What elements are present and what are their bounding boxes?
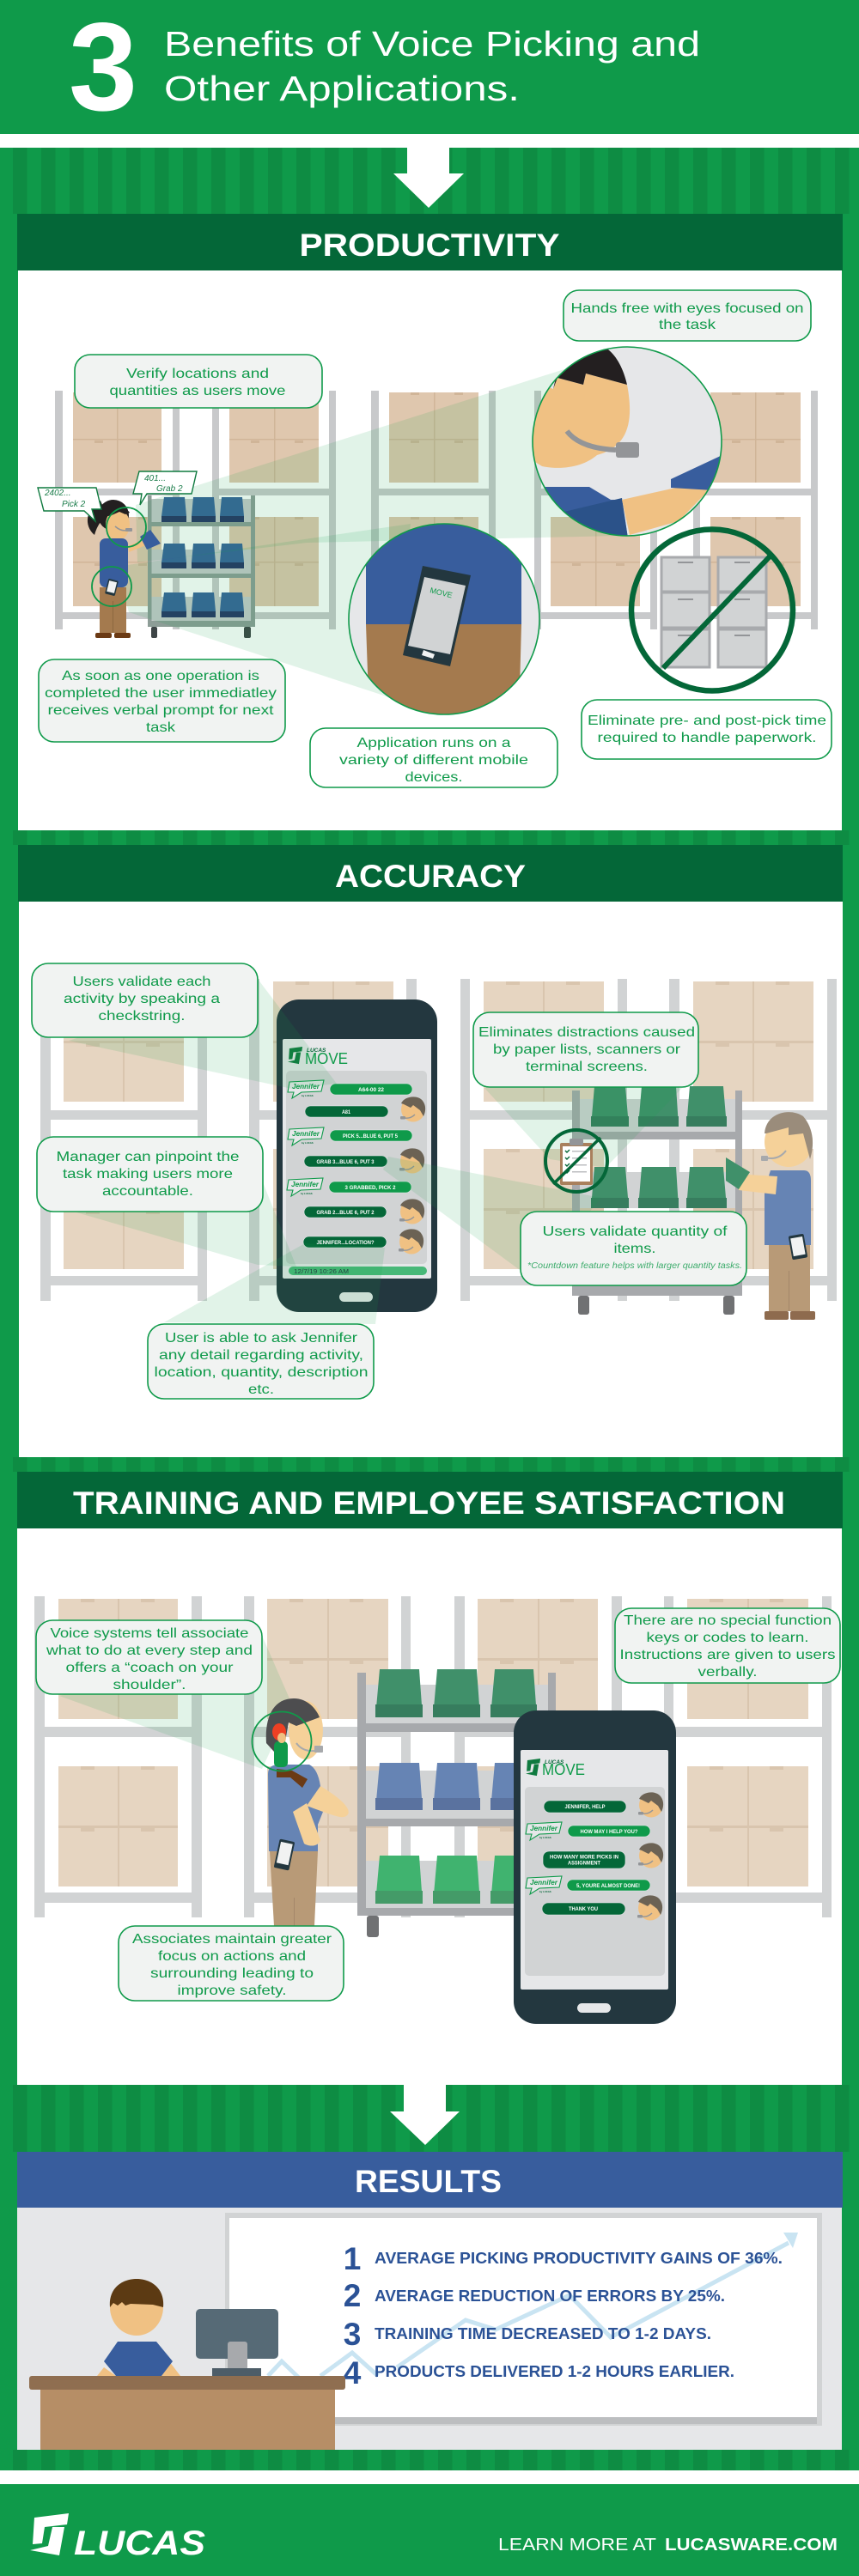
phone app: training conversation (514, 1710, 676, 2024)
panel: accuracy (18, 845, 843, 1457)
person: accuracy worker (726, 1112, 815, 1320)
speech bubble: 401 grab 2: 401... (144, 474, 166, 483)
jennifer message 1 (526, 1822, 562, 1840)
result 4 (344, 2355, 734, 2391)
status bar (289, 1267, 427, 1275)
logo: lucas: LUCAS (74, 2524, 205, 2562)
callout: eliminate paperwork: Eliminate pre- and post-pick time (588, 714, 826, 728)
heading: accuracy: ACCURACY (335, 859, 526, 894)
jennifer message 2 (526, 1876, 562, 1894)
callout: no special keys: Instructions are given to users (620, 1648, 835, 1662)
callout: verbal prompt (39, 659, 285, 742)
heading: training: TRAINING AND EMPLOYEE SATISFACTION (73, 1485, 785, 1521)
worker figure (88, 500, 161, 638)
logo: lucas move: LUCAS (545, 1759, 564, 1765)
pill: how many more picks: HOW MANY MORE PICKS IN (550, 1855, 618, 1860)
heading: productivity: PRODUCTIVITY (299, 228, 560, 263)
pill: thank you (542, 1903, 625, 1915)
cart with green bins (572, 1086, 742, 1315)
pocket phone (105, 579, 119, 596)
result 1: 1 (344, 2241, 361, 2276)
callout: verbal prompt: receives verbal prompt for next (48, 703, 274, 718)
callout: validate quantity: Users validate quantity of (543, 1224, 728, 1239)
icon: user face (399, 1148, 424, 1173)
logo: lucas move (526, 1759, 585, 1778)
callout: users validate: checkstring. (98, 1009, 186, 1024)
icon: user face (399, 1229, 423, 1254)
title text: Benefits of Voice Picking and (164, 24, 700, 64)
callout: associates safety (119, 1926, 344, 2001)
whiteboard (225, 2213, 822, 2426)
icon: user face (638, 1792, 663, 1817)
callout: ask jennifer (148, 1324, 374, 1399)
callout: manager: Manager can pinpoint the (57, 1150, 240, 1164)
pill: A64-00 22 (330, 1084, 412, 1095)
icon: user face (399, 1199, 424, 1224)
result 4: PRODUCTS DELIVERED 1-2 HOURS EARLIER. (375, 2362, 734, 2380)
header band (0, 0, 859, 148)
jennifer message 1 (288, 1080, 324, 1098)
pill: pick 5 (330, 1130, 412, 1141)
learn more link text: LEARN MORE AT (498, 2536, 656, 2555)
callout: ask jennifer: User is able to ask Jennifer (165, 1331, 358, 1346)
headset (115, 526, 129, 531)
callout: mobile devices: devices. (405, 770, 462, 785)
person at desk (97, 2279, 180, 2376)
pill: how many more picks (543, 1851, 625, 1868)
result 2: AVERAGE REDUCTION OF ERRORS BY 25%. (375, 2287, 725, 2305)
computer monitor (196, 2309, 278, 2377)
callout: validate quantity (521, 1212, 746, 1285)
jennifer message 3: Jennifer (291, 1181, 320, 1188)
callout: ask jennifer: etc. (248, 1382, 274, 1397)
callout: users validate (32, 963, 258, 1037)
callout: voice systems (36, 1620, 262, 1694)
icon: user face (638, 1843, 663, 1868)
callout: no special keys: There are no special function (624, 1613, 832, 1628)
heading: results: RESULTS (355, 2164, 502, 2199)
pill: grab 3: GRAB 3...BLUE 6, PUT 3 (316, 1159, 375, 1165)
callout: mobile devices (310, 728, 557, 787)
pill: jennifer help: JENNIFER, HELP (565, 1804, 606, 1810)
pill: A81 (305, 1106, 388, 1117)
panel: training and employee satisfaction (17, 1472, 843, 2085)
callout: associates safety: Associates maintain greater (132, 1932, 332, 1947)
callout: associates safety: focus on actions and (158, 1949, 306, 1964)
light beams (69, 979, 682, 1324)
arrow: header to productivity (393, 148, 464, 208)
callout: voice systems: shoulder”. (113, 1678, 186, 1692)
cart with bins (357, 1669, 556, 1937)
callout: voice systems: what to do at every step and (46, 1643, 253, 1658)
callout: verbal prompt: completed the user immediatley (45, 686, 277, 701)
callout: hands free (564, 290, 811, 341)
coach on shoulder (272, 1723, 308, 1788)
heading: productivity (17, 214, 843, 270)
callout: eliminates distractions: by paper lists, scanners or (493, 1042, 681, 1057)
pill: how may i help you (568, 1826, 650, 1837)
callout: hands free: Hands free with eyes focused on (570, 301, 804, 316)
light beam (59, 1637, 292, 1769)
callout: voice systems: offers a “coach on your (65, 1661, 234, 1675)
pill: A81: A81 (342, 1109, 350, 1115)
jennifer message 3: by LUCAS (301, 1192, 313, 1195)
status bar: 12/7/19 10:26 AM (294, 1267, 349, 1275)
pill: how may i help you: HOW MAY I HELP YOU? (581, 1829, 638, 1835)
cart with blue bins (148, 495, 255, 638)
icon: phone close-up circle (349, 515, 539, 721)
callout: manager: task making users more (63, 1167, 233, 1182)
callout: hands free: the task (659, 318, 716, 332)
icon: user face (400, 1097, 425, 1121)
jennifer message 1: by LUCAS (539, 1836, 551, 1839)
pill: thank you: THANK YOU (569, 1906, 598, 1912)
title text (164, 24, 700, 108)
learn more link text: LUCASWARE.COM (665, 2536, 838, 2555)
callout: users validate: Users validate each (72, 975, 211, 989)
warehouse racks and boxes (40, 979, 837, 1301)
pill: jennifer location (303, 1236, 387, 1248)
footer (0, 2470, 859, 2576)
callout: verbal prompt: task (146, 720, 176, 735)
result 2 (344, 2278, 725, 2313)
pill: 3 grabbed: 3 GRABBED, PICK 2 (345, 1185, 396, 1191)
phone home button (339, 1292, 373, 1302)
jennifer message 1: Jennifer (530, 1825, 558, 1832)
panel: results (17, 2152, 843, 2450)
callout: verify locations (75, 355, 322, 408)
jennifer message 3 (287, 1178, 323, 1196)
callout: verify locations: quantities as users move (110, 384, 286, 398)
pill: 3 grabbed (329, 1182, 411, 1193)
callout: validate quantity: items. (613, 1242, 656, 1256)
pill: grab 2 (304, 1206, 387, 1218)
panel: productivity (17, 214, 843, 830)
heading: results (17, 2152, 843, 2208)
jennifer message 1: Jennifer (292, 1083, 320, 1091)
phone (403, 566, 471, 666)
result 3 (344, 2317, 711, 2352)
pill: jennifer location: JENNIFER...LOCATION? (316, 1240, 375, 1246)
icon: phone close-up circle: MOVE (430, 586, 454, 599)
callout: manager: accountable. (102, 1184, 193, 1199)
result list (344, 2241, 783, 2391)
person: training worker with coach on shoulder (253, 1698, 349, 1926)
callout: eliminates distractions: Eliminates distractions caused (478, 1025, 695, 1040)
pill: pick 5: PICK 5...BLUE 6, PUT 5 (343, 1133, 398, 1139)
result 2: 2 (344, 2278, 361, 2313)
result 3: TRAINING TIME DECREASED TO 1-2 DAYS. (375, 2324, 711, 2342)
result 3: 3 (344, 2317, 361, 2352)
callout: ask jennifer: location, quantity, description (155, 1365, 368, 1380)
speech bubble: 2402 pick 2 (38, 488, 101, 521)
callout: eliminate paperwork: required to handle paperwork. (598, 731, 816, 745)
result 1 (344, 2241, 783, 2276)
logo: lucas move: LUCAS (307, 1048, 326, 1054)
jennifer message 2 (288, 1127, 324, 1145)
warehouse racks and boxes (55, 391, 818, 629)
speech bubble: 401 grab 2: Grab 2 (156, 484, 183, 494)
callout: associates safety: surrounding leading to (150, 1966, 314, 1981)
callout: eliminates distractions: terminal screens. (526, 1060, 648, 1074)
jennifer message 1: by LUCAS (302, 1094, 314, 1097)
pill: almost done (567, 1880, 650, 1891)
line chart arrow (268, 2233, 798, 2383)
warehouse racks and boxes (34, 1596, 832, 1917)
pill: jennifer help (544, 1801, 626, 1813)
pill: how many more picks: ASSIGNMENT (568, 1860, 600, 1867)
callout: eliminates distractions (473, 1012, 698, 1087)
title number: 3 (69, 0, 137, 137)
heading: accuracy (18, 845, 843, 902)
pill: almost done: 5, YOURE ALMOST DONE! (576, 1883, 640, 1889)
pill: A64-00 22: A64-00 22 (358, 1087, 384, 1093)
callout: validate quantity: *Countdown feature helps with larger quantity tasks. (527, 1261, 742, 1271)
clipboard (140, 530, 161, 550)
arrow: training to results (390, 2085, 460, 2145)
icon: headset close-up circle (532, 346, 722, 537)
callout: users validate: activity by speaking a (64, 992, 220, 1006)
jennifer message 2: by LUCAS (539, 1890, 551, 1893)
callout: eliminate paperwork (582, 700, 832, 759)
callout: ask jennifer: any detail regarding activity, (159, 1348, 363, 1363)
logo: lucas move: MOVE (305, 1050, 348, 1067)
callout: verbal prompt: As soon as one operation is (62, 669, 259, 683)
icon: no paper checklist (545, 1130, 607, 1192)
callout: no special keys: keys or codes to learn. (646, 1631, 809, 1645)
speech bubble: 401 grab 2 (133, 471, 197, 505)
light beams (116, 369, 618, 697)
phone app: accuracy conversation (277, 999, 437, 1312)
phone home button (577, 2003, 611, 2013)
icon: no paperwork (631, 529, 793, 690)
speech bubble: 2402 pick 2: 2402... (44, 489, 71, 498)
jennifer message 2: Jennifer (292, 1130, 320, 1138)
learn more link text (498, 2536, 838, 2555)
callout: mobile devices: variety of different mobile (339, 753, 528, 768)
callout: associates safety: improve safety. (177, 1984, 287, 1998)
callout: no special keys (615, 1608, 840, 1683)
logo: lucas (30, 2513, 205, 2562)
pill: grab 3 (304, 1156, 387, 1167)
callout: manager (37, 1137, 263, 1212)
callout: no special keys: verbally. (698, 1665, 758, 1680)
speech bubble: 2402 pick 2: Pick 2 (62, 500, 86, 509)
jennifer message 2: Jennifer (530, 1879, 558, 1886)
logo: lucas move (288, 1047, 348, 1067)
icon: user face (637, 1895, 662, 1920)
result 4: 4 (344, 2355, 362, 2391)
callout: verify locations: Verify locations and (126, 367, 269, 381)
jennifer message 2: by LUCAS (302, 1141, 314, 1145)
title text: Other Applications. (164, 69, 520, 108)
pill: grab 2: GRAB 2...BLUE 6, PUT 2 (316, 1210, 375, 1216)
heading: training (17, 1472, 843, 1528)
desk (29, 2376, 345, 2450)
callout: mobile devices: Application runs on a (357, 736, 511, 750)
callout: voice systems: Voice systems tell associate (50, 1626, 249, 1641)
logo: lucas move: MOVE (542, 1761, 585, 1778)
result 1: AVERAGE PICKING PRODUCTIVITY GAINS OF 36%. (375, 2249, 783, 2267)
